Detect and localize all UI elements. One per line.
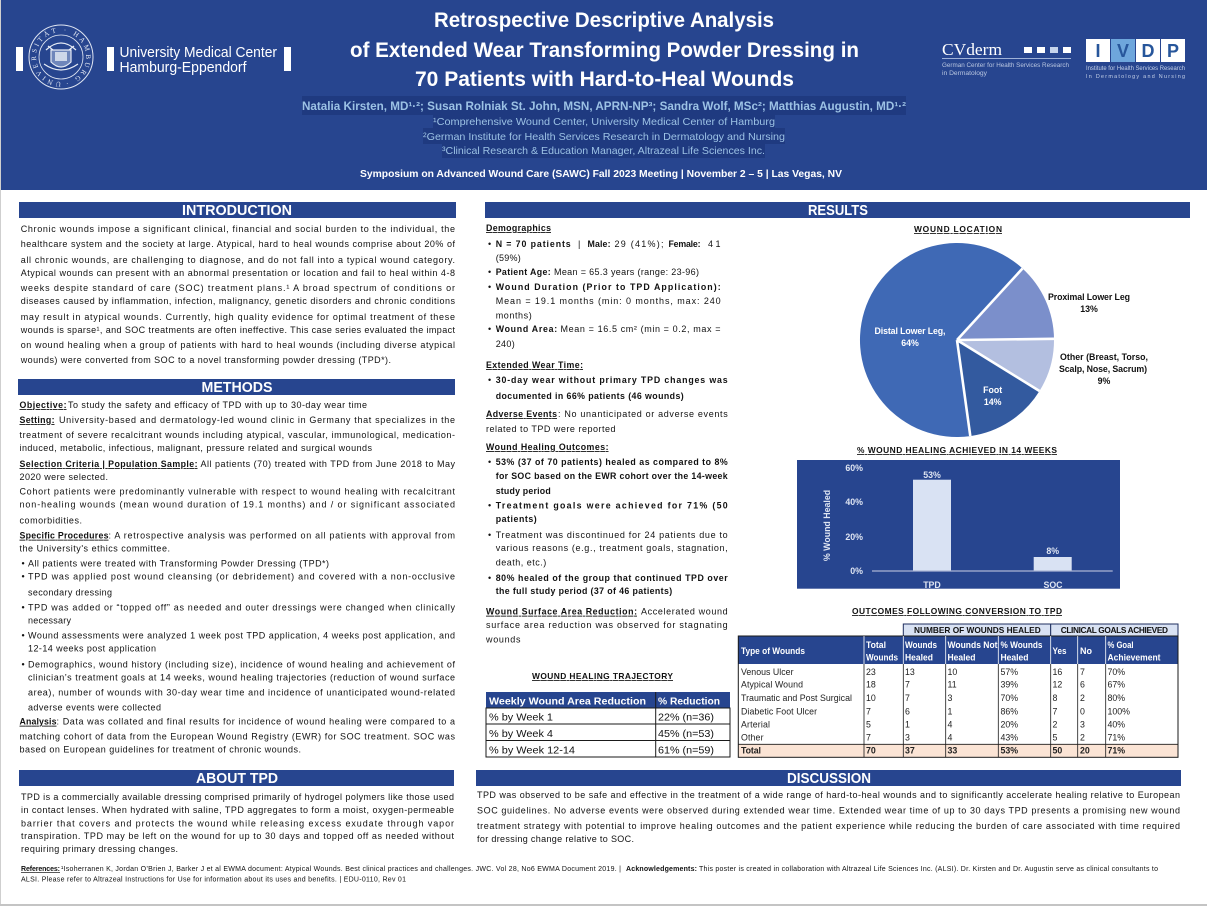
pie chart: wound location: Other (Breast, Torso, bbox=[1060, 352, 1148, 362]
text block: introduction: on wound healing when a group of patients with hard to heal wounds (including diverse atypical bbox=[21, 340, 455, 350]
text block: wound surface area reduction: Accelerated wound bbox=[641, 607, 728, 617]
references and acknowledgements: ALSI. Please refer to Altrazeal Instructions for Use for information about its uses and benefits. | EDU-0110, Rev 01 bbox=[21, 876, 406, 884]
text block: methods: non-healing wounds (mean wound duration of 19.1 months) and / or significant associated bbox=[20, 500, 455, 510]
title: 70 Patients with Hard-to-Heal Wounds bbox=[415, 67, 794, 91]
logo: IVDP: I bbox=[1095, 41, 1101, 61]
table row: traumatic and post surgical: 10 bbox=[866, 693, 876, 703]
text block: methods: All patients were treated with Transforming Powder Dressing (TPD*) bbox=[28, 559, 329, 569]
table row: atypical wound: 11 bbox=[948, 680, 957, 690]
table row: atypical wound: 18 bbox=[866, 680, 876, 690]
pie chart: wound location: Scalp, Nose, Sacrum) bbox=[1059, 364, 1147, 374]
table row: venous ulcer: 57% bbox=[1000, 667, 1018, 677]
text block: demographics: | bbox=[578, 239, 580, 249]
text block: introduction: may result in atypical wounds. Currently, high quality evidence for optimal treatment of these bbox=[21, 312, 455, 322]
table row: atypical wound: 67% bbox=[1108, 680, 1125, 690]
text block: demographics: Female: bbox=[668, 239, 701, 249]
heading: results: RESULTS bbox=[808, 203, 868, 219]
text block: demographics: • bbox=[488, 239, 491, 249]
table row: total: 37 bbox=[905, 746, 915, 756]
pie chart: wound location: 14% bbox=[984, 397, 1002, 407]
table row: diabetic foot ulcer: 7 bbox=[1052, 707, 1058, 717]
logo: CVderm bbox=[942, 40, 1071, 77]
text block: wound healing outcomes: various reasons (e.g., treatment goals, stagnation, bbox=[496, 543, 728, 553]
text block: methods: : Data was collated and final results for incidence of wound healing were compared to a bbox=[56, 717, 455, 727]
table: outcomes following conversion to TPD: % Goal bbox=[1108, 640, 1134, 650]
logo: University Medical Center Hamburg-Eppendorf: University Medical Center bbox=[120, 44, 277, 61]
text block: wound healing outcomes bbox=[486, 442, 728, 596]
table row: total: 71% bbox=[1108, 746, 1125, 756]
bar chart: wound healing in 14 weeks: 40% bbox=[845, 497, 863, 507]
pie chart: wound location: Proximal Lower Leg bbox=[1048, 292, 1130, 302]
table: outcomes following conversion to TPD: Healed bbox=[1000, 653, 1028, 663]
text block: methods bbox=[20, 400, 456, 755]
heading: wound healing trajectory: WOUND HEALING TRAJECTORY bbox=[532, 671, 673, 681]
text block: about TPD: TPD is a commercially available dressing comprised primarily of hydrogel polymers like those used bbox=[21, 792, 454, 802]
text block: discussion bbox=[477, 790, 1180, 844]
text block: wound healing outcomes: • bbox=[488, 530, 491, 540]
text block: discussion: treatment strategy with potential to improve healing outcomes and the patient experience while reducing the burden of care associated with time required bbox=[477, 821, 1180, 831]
bar chart: wound healing in 14 weeks: TPD bbox=[923, 580, 941, 590]
table: outcomes following conversion to TPD: No bbox=[1080, 646, 1092, 656]
table row: other: 43% bbox=[1000, 733, 1018, 743]
text block: about TPD: transpiration. TPD may be left on the wound for up to 30 days and topped off as needed without bbox=[21, 831, 454, 841]
text block: wound healing outcomes: • bbox=[488, 457, 491, 467]
text block: methods: secondary dressing bbox=[28, 588, 112, 598]
logo: IVDP: P bbox=[1167, 41, 1179, 61]
table: outcomes following conversion to TPD bbox=[738, 606, 1178, 757]
references and acknowledgements: This poster is created in collaboration with Altrazeal Life Sciences Inc. (ALSI). Dr. Kirsten and Dr. Augustin serve as clinical consultants to bbox=[699, 866, 1158, 873]
text block: demographics: N = 70 patients bbox=[496, 239, 571, 249]
heading: wound location: WOUND LOCATION bbox=[914, 224, 1002, 234]
table row: venous ulcer bbox=[741, 667, 1125, 677]
table row: arterial: 4 bbox=[948, 720, 952, 730]
table row: traumatic and post surgical: 2 bbox=[1080, 693, 1085, 703]
table row: arterial: 3 bbox=[1080, 720, 1085, 730]
table row: total: 50 bbox=[1052, 746, 1062, 756]
text block: methods: : A retrospective analysis was performed on all patients with approval from bbox=[108, 531, 455, 541]
authors and affiliations: Natalia Kirsten, MD¹·²; Susan Rolniak St. John, MSN, APRN-NP³; Sandra Wolf, MSc²; Matthias Augustin, MD¹·² bbox=[302, 101, 906, 113]
table row: arterial: 20% bbox=[1000, 720, 1018, 730]
bar chart: wound healing in 14 weeks: SOC bbox=[1043, 580, 1063, 590]
table row: arterial: 1 bbox=[905, 720, 910, 730]
text block: methods: Objective: bbox=[20, 400, 67, 410]
title bbox=[350, 8, 859, 91]
table: outcomes following conversion to TPD: Healed bbox=[948, 653, 976, 663]
text block: methods: Wound assessments were analyzed 1 week post TPD application, 4 weeks post application, and bbox=[28, 631, 455, 641]
table row: diabetic foot ulcer: 1 bbox=[948, 707, 952, 717]
text block: demographics: • bbox=[488, 324, 491, 334]
bar chart: wound healing in 14 weeks: 53% bbox=[923, 470, 941, 480]
bar chart: wound healing in 14 weeks: % Wound Healed bbox=[822, 490, 832, 561]
text block: introduction: diseases caused by inflammation, infection, malignancy, genetic disorders and chronic conditions bbox=[21, 296, 456, 306]
text block: methods: Demographics, wound history (including size), incidence of wound healing and achievement of bbox=[28, 660, 455, 670]
table row: venous ulcer: 70% bbox=[1108, 667, 1125, 677]
text block: wound healing outcomes: the full study period (37 of 46 patients) bbox=[496, 586, 672, 596]
logo: CVderm: CVderm bbox=[942, 40, 1002, 59]
bar chart: wound healing in 14 weeks: 0% bbox=[850, 566, 863, 576]
text block: extended wear time: Extended Wear Time: bbox=[486, 360, 583, 370]
pie chart: wound location: 13% bbox=[1080, 304, 1098, 314]
text block: about TPD: requiring primary dressing changes. bbox=[21, 844, 178, 854]
text block: demographics: months) bbox=[496, 311, 532, 321]
table row: diabetic foot ulcer: 100% bbox=[1108, 707, 1130, 717]
text block: adverse events: Adverse Events bbox=[486, 409, 557, 419]
authors and affiliations: ¹Comprehensive Wound Center, University Medical Center of Hamburg bbox=[433, 116, 775, 128]
text block: introduction bbox=[20, 224, 456, 365]
references and acknowledgements: References: bbox=[21, 866, 60, 873]
text block: adverse events: : No unanticipated or adverse events bbox=[558, 409, 728, 419]
text block: methods: matching cohort of data from the European Wound Registry (EWR) for SOC treatment. SOC was bbox=[20, 732, 456, 742]
table: wound healing trajectory: 61% (n=59) bbox=[658, 744, 714, 756]
text block: demographics: 41 bbox=[708, 239, 720, 249]
title: of Extended Wear Transforming Powder Dressing in bbox=[350, 38, 859, 62]
text block: discussion: SOC guidelines. No adverse events were observed during extended wear time. Extended wear time of up to 30 days TPD presents a promising new wound bbox=[477, 806, 1180, 816]
table: outcomes following conversion to TPD: CLINICAL GOALS ACHIEVED bbox=[1061, 625, 1168, 635]
text block: demographics: 240) bbox=[496, 339, 515, 349]
text block: methods: • bbox=[22, 572, 25, 582]
table row: atypical wound: 12 bbox=[1052, 680, 1062, 690]
pie chart: wound location: 9% bbox=[1098, 376, 1111, 386]
logo: University Medical Center Hamburg-Eppendorf bbox=[16, 24, 291, 90]
table row: traumatic and post surgical: Traumatic and Post Surgical bbox=[741, 693, 852, 703]
table row: venous ulcer: 23 bbox=[866, 667, 876, 677]
text block: wound healing outcomes: Treatment goals were achieved for 71% (50 bbox=[496, 501, 728, 511]
table row: traumatic and post surgical: 7 bbox=[905, 693, 910, 703]
text block: methods: TPD was applied post wound cleansing (or debridement) and covered with a non-occlusive bbox=[28, 572, 455, 582]
table row: atypical wound: 6 bbox=[1080, 680, 1085, 690]
text block: introduction: Atypical wounds can present with an abnormal presentation or location and fail to heal within 4-8 bbox=[21, 268, 455, 278]
table: wound healing trajectory: % by Week 4 bbox=[489, 728, 553, 740]
text block: methods: Analysis bbox=[20, 717, 57, 727]
text block: about TPD bbox=[21, 792, 454, 854]
pie chart: wound location bbox=[860, 224, 1148, 437]
text block: extended wear time bbox=[486, 360, 728, 401]
text block: methods: the University's ethics committee. bbox=[20, 544, 170, 554]
text block: wound surface area reduction: wounds bbox=[485, 635, 521, 645]
heading: introduction: INTRODUCTION bbox=[182, 203, 292, 219]
table row: other: 5 bbox=[1052, 733, 1058, 743]
table row: traumatic and post surgical: 8 bbox=[1052, 693, 1058, 703]
table: wound healing trajectory bbox=[486, 671, 730, 757]
text block: wound healing outcomes: 53% (37 of 70 patients) healed as compared to 8% bbox=[496, 457, 728, 467]
table: wound healing trajectory: 45% (n=53) bbox=[658, 728, 714, 740]
text block: wound healing outcomes: death, etc.) bbox=[496, 558, 546, 568]
table row: diabetic foot ulcer: 7 bbox=[866, 707, 871, 717]
table: wound healing trajectory: % by Week 1 bbox=[489, 712, 553, 724]
table: outcomes following conversion to TPD: Wounds bbox=[905, 640, 937, 650]
table row: other: 4 bbox=[948, 733, 952, 743]
text block: methods: Selection Criteria | Population Sample: bbox=[20, 459, 198, 469]
panel: about TPD bbox=[19, 770, 454, 854]
table row: other: 3 bbox=[905, 733, 910, 743]
text block: methods: TPD was added or “topped off” as needed and outer dressings were changed when clinically bbox=[28, 603, 456, 613]
table row: diabetic foot ulcer: Diabetic Foot Ulcer bbox=[741, 707, 817, 717]
logo: IVDP: In Dermatology and Nursing bbox=[1086, 74, 1185, 80]
table: outcomes following conversion to TPD: Healed bbox=[905, 653, 933, 663]
text block: extended wear time: documented in 66% patients (46 wounds) bbox=[496, 391, 684, 401]
table: outcomes following conversion to TPD: Achievement bbox=[1108, 653, 1160, 663]
panel: methods bbox=[18, 379, 456, 755]
logo: IVDP: V bbox=[1117, 41, 1129, 61]
table row: diabetic foot ulcer: 6 bbox=[905, 707, 910, 717]
table row: atypical wound bbox=[741, 680, 1125, 690]
text block: methods: clinician’s treatment goals at 14 weeks, wound healing trajectories (reduction of wound surface bbox=[28, 673, 455, 683]
text block: methods: Setting: bbox=[20, 415, 55, 425]
table row: diabetic foot ulcer: 86% bbox=[1000, 707, 1018, 717]
text block: methods: Cohort patients were predominantly vulnerable with respect to wound healing with recalcitrant bbox=[20, 487, 455, 497]
text block: demographics: 29 (41%); bbox=[614, 239, 664, 249]
authors and affiliations bbox=[302, 96, 906, 158]
table row: other: 7 bbox=[866, 733, 871, 743]
authors and affiliations: ³Clinical Research & Education Manager, Altrazeal Life Sciences Inc. bbox=[442, 145, 765, 157]
text block: methods: area), number of wounds with 30-day wear time and incidence of unanticipated wound-related bbox=[28, 688, 455, 698]
table row: arterial bbox=[741, 720, 1125, 730]
text block: wound healing outcomes: Wound Healing Outcomes: bbox=[486, 442, 609, 452]
text block: wound healing outcomes: for SOC based on the EWR cohort over the 14-week bbox=[496, 471, 728, 481]
heading: outcomes: OUTCOMES FOLLOWING CONVERSION TO TPD bbox=[852, 606, 1062, 616]
heading: about TPD: ABOUT TPD bbox=[196, 771, 278, 787]
references and acknowledgements: Acknowledgements: bbox=[626, 866, 697, 873]
logo: IVDP bbox=[1086, 39, 1186, 80]
bar chart: wound healing in 14 weeks: 8% bbox=[1046, 546, 1059, 556]
text block: introduction: wounds is sparse¹, and SOC treatments are often ineffective. This case series evaluated the impact bbox=[20, 325, 455, 335]
table row: arterial: 5 bbox=[866, 720, 871, 730]
text block: methods: based on European guidelines for treatment of chronic wounds. bbox=[20, 745, 301, 755]
table row: diabetic foot ulcer bbox=[741, 707, 1130, 717]
bar chart: wound healing in 14 weeks: 20% bbox=[845, 532, 863, 542]
logo: IVDP: Institute for Health Services Research bbox=[1086, 65, 1186, 72]
text block: demographics: Patient Age: bbox=[496, 267, 551, 277]
text block: introduction: weeks despite standard of care (SOC) treatment plans.¹ A broad spectrum of conditions or bbox=[20, 283, 455, 293]
table row: traumatic and post surgical bbox=[741, 693, 1125, 703]
panel: results bbox=[485, 202, 1190, 757]
pie chart: wound location: 64% bbox=[901, 338, 919, 348]
text block: extended wear time: • bbox=[488, 375, 491, 385]
text block: demographics: Mean = 65.3 years (range: 23-96) bbox=[554, 267, 699, 277]
text block: wound surface area reduction: surface area reduction was observed for stagnating bbox=[486, 620, 728, 630]
bar chart: wound healing in 14 weeks: 60% bbox=[845, 463, 863, 473]
table row: total: 20 bbox=[1080, 746, 1090, 756]
table row: venous ulcer: 13 bbox=[905, 667, 915, 677]
text block: methods: To study the safety and efficacy of TPD with up to 30-day wear time bbox=[68, 400, 367, 410]
text block: wound healing outcomes: patients) bbox=[496, 514, 537, 524]
table row: venous ulcer: Venous Ulcer bbox=[741, 667, 794, 677]
references and acknowledgements: ¹Isoherranen K, Jordan O’Brien J, Barker J et al EWMA document: Atypical Wounds. Best clinical practices and challenges. JWC. Vol 28, No6 EWMA Document 2019. | bbox=[61, 866, 621, 873]
text block: extended wear time: 30-day wear without primary TPD changes was bbox=[496, 375, 728, 385]
table: outcomes following conversion to TPD: Total bbox=[866, 640, 886, 650]
references and acknowledgements bbox=[21, 866, 1158, 884]
table row: arterial: Arterial bbox=[741, 720, 770, 730]
logo: CVderm: German Center for Health Services Research bbox=[942, 62, 1070, 69]
table row: arterial: 2 bbox=[1052, 720, 1058, 730]
table row: total: 70 bbox=[866, 746, 876, 756]
text block: wound healing outcomes: study period bbox=[496, 486, 551, 496]
table row: other: 71% bbox=[1108, 733, 1125, 743]
table row: atypical wound: Atypical Wound bbox=[741, 680, 803, 690]
text block: demographics: Male: bbox=[588, 239, 611, 249]
text block: demographics: Wound Area: bbox=[496, 324, 557, 334]
table row: arterial: 40% bbox=[1108, 720, 1125, 730]
table row: total: Total bbox=[741, 746, 761, 756]
table: outcomes following conversion to TPD: Wounds Not bbox=[948, 640, 998, 650]
logo: University Medical Center Hamburg-Eppendorf: Hamburg-Eppendorf bbox=[120, 59, 247, 76]
panel: introduction bbox=[19, 202, 456, 365]
text block: wound healing outcomes: • bbox=[488, 501, 491, 511]
header banner bbox=[1, 0, 1207, 190]
text block: methods: comorbidities. bbox=[20, 516, 82, 526]
table row: traumatic and post surgical: 80% bbox=[1108, 693, 1125, 703]
table row: total bbox=[741, 746, 1125, 756]
heading: discussion: DISCUSSION bbox=[787, 771, 871, 787]
text block: introduction: all chronic wounds, are challenging to diagnose, and do not fall into a typical wound category. bbox=[21, 255, 455, 265]
text block: adverse events bbox=[486, 409, 728, 434]
text block: methods: • bbox=[22, 660, 25, 670]
table row: total: 33 bbox=[948, 746, 957, 756]
text block: wound healing outcomes: 80% healed of the group that continued TPD over bbox=[496, 573, 728, 583]
text block: demographics bbox=[486, 223, 721, 349]
authors and affiliations: ²German Institute for Health Services Research in Dermatology and Nursing bbox=[423, 131, 785, 143]
pie chart: wound location: Foot bbox=[983, 385, 1002, 395]
table: wound healing trajectory: % Reduction bbox=[658, 696, 720, 708]
table: outcomes following conversion to TPD: Wounds bbox=[866, 653, 898, 663]
pie chart: wound location: Distal Lower Leg, bbox=[874, 326, 946, 336]
text block: wound healing outcomes: Treatment was discontinued for 24 patients due to bbox=[496, 530, 728, 540]
table: outcomes following conversion to TPD: Yes bbox=[1052, 646, 1066, 656]
text block: methods: necessary bbox=[28, 616, 72, 626]
table row: venous ulcer: 10 bbox=[948, 667, 957, 677]
table row: other: 2 bbox=[1080, 733, 1085, 743]
text block: about TPD: barrier that covers and protects the wound while releasing excess exudate through vapor bbox=[21, 819, 454, 829]
text block: demographics: Mean = 19.1 months (min: 0 months, max: 240 bbox=[496, 296, 721, 306]
text block: methods: • bbox=[22, 631, 25, 641]
table row: total: 53% bbox=[1000, 746, 1018, 756]
table row: venous ulcer: 16 bbox=[1052, 667, 1062, 677]
table: wound healing trajectory: Weekly Wound Area Reduction bbox=[489, 696, 646, 708]
text block: introduction: healthcare system and the society at large. Atypical, hard to heal wounds comprise about 20% of bbox=[21, 239, 455, 249]
conference line: Symposium on Advanced Wound Care (SAWC) Fall 2023 Meeting | November 2 – 5 | Las Vegas, NV bbox=[360, 168, 842, 180]
text block: methods: University-based and dermatology-led wound clinic in Germany that specializes in the bbox=[59, 415, 455, 425]
text block: methods: adverse events were collected bbox=[28, 703, 161, 713]
text block: methods: induced, metabolic, infectious, malignant, pressure related and surgical wounds bbox=[20, 443, 372, 453]
table row: traumatic and post surgical: 70% bbox=[1000, 693, 1018, 703]
text block: demographics: • bbox=[488, 267, 491, 277]
text block: discussion: for dressing change relative to SOC. bbox=[477, 834, 634, 844]
table row: diabetic foot ulcer: 0 bbox=[1080, 707, 1085, 717]
table: wound healing trajectory: 22% (n=36) bbox=[658, 712, 714, 724]
text block: wound surface area reduction bbox=[485, 607, 728, 645]
text block: methods: 12-14 weeks post application bbox=[28, 644, 156, 654]
text block: demographics: (59%) bbox=[496, 253, 521, 263]
panel: discussion bbox=[476, 770, 1181, 844]
table row: other bbox=[741, 733, 1125, 743]
bar chart: wound healing in 14 weeks bbox=[797, 445, 1120, 590]
table row: other: Other bbox=[741, 733, 764, 743]
table: outcomes following conversion to TPD: NUMBER OF WOUNDS HEALED bbox=[914, 625, 1041, 635]
table: wound healing trajectory: % by Week 12-14 bbox=[489, 744, 575, 756]
text block: wound healing outcomes: • bbox=[488, 573, 491, 583]
text block: methods: • bbox=[22, 559, 25, 569]
text block: demographics: Mean = 16.5 cm² (min = 0.2, max = bbox=[560, 324, 720, 334]
logo: CVderm: in Dermatology bbox=[942, 70, 988, 77]
text block: discussion: TPD was observed to be safe and effective in the treatment of a wide range of hard-to-heal wounds and to significantly accelerate healing relative to European bbox=[477, 790, 1180, 800]
text block: methods: Specific Procedures bbox=[20, 531, 109, 541]
table row: traumatic and post surgical: 3 bbox=[948, 693, 952, 703]
text block: wound surface area reduction: Wound Surface Area Reduction: bbox=[486, 607, 637, 617]
logo: IVDP: D bbox=[1142, 41, 1154, 61]
heading: wound healing achieved: % WOUND HEALING ACHIEVED IN 14 WEEKS bbox=[857, 445, 1057, 455]
text block: methods: All patients (70) treated with TPD from June 2018 to May bbox=[200, 459, 456, 469]
title: Retrospective Descriptive Analysis bbox=[434, 8, 774, 32]
text block: demographics: Wound Duration (Prior to TPD Application): bbox=[496, 282, 721, 292]
text block: adverse events: related to TPD were reported bbox=[486, 424, 616, 434]
table row: venous ulcer: 7 bbox=[1080, 667, 1085, 677]
text block: introduction: wounds) were converted from SOC to a novel transforming powder dressing (TPD*). bbox=[20, 355, 391, 365]
table row: atypical wound: 39% bbox=[1000, 680, 1018, 690]
logo: University Medical Center Hamburg-Eppendorf: UNIVERSITÄT · HAMBURG · bbox=[32, 28, 91, 87]
text block: methods: • bbox=[22, 603, 25, 613]
text block: about TPD: in contact lenses. When hydrated with saline, TPD aggregates to form a moist, oxygen-permeable bbox=[21, 805, 454, 815]
text block: methods: 2020 were selected. bbox=[20, 472, 108, 482]
text block: demographics: Demographics bbox=[486, 223, 551, 233]
text block: methods: treatment of severe recalcitrant wounds including atypical, vascular, immunological, medication- bbox=[20, 430, 455, 440]
heading: methods: METHODS bbox=[202, 380, 273, 396]
table row: atypical wound: 7 bbox=[905, 680, 910, 690]
table: outcomes following conversion to TPD: Type of Wounds bbox=[741, 646, 805, 656]
text block: demographics: • bbox=[488, 282, 491, 292]
text block: introduction: Chronic wounds impose a significant clinical, financial and social burden to the individual, the bbox=[21, 224, 455, 234]
table: outcomes following conversion to TPD: % Wounds bbox=[1000, 640, 1042, 650]
